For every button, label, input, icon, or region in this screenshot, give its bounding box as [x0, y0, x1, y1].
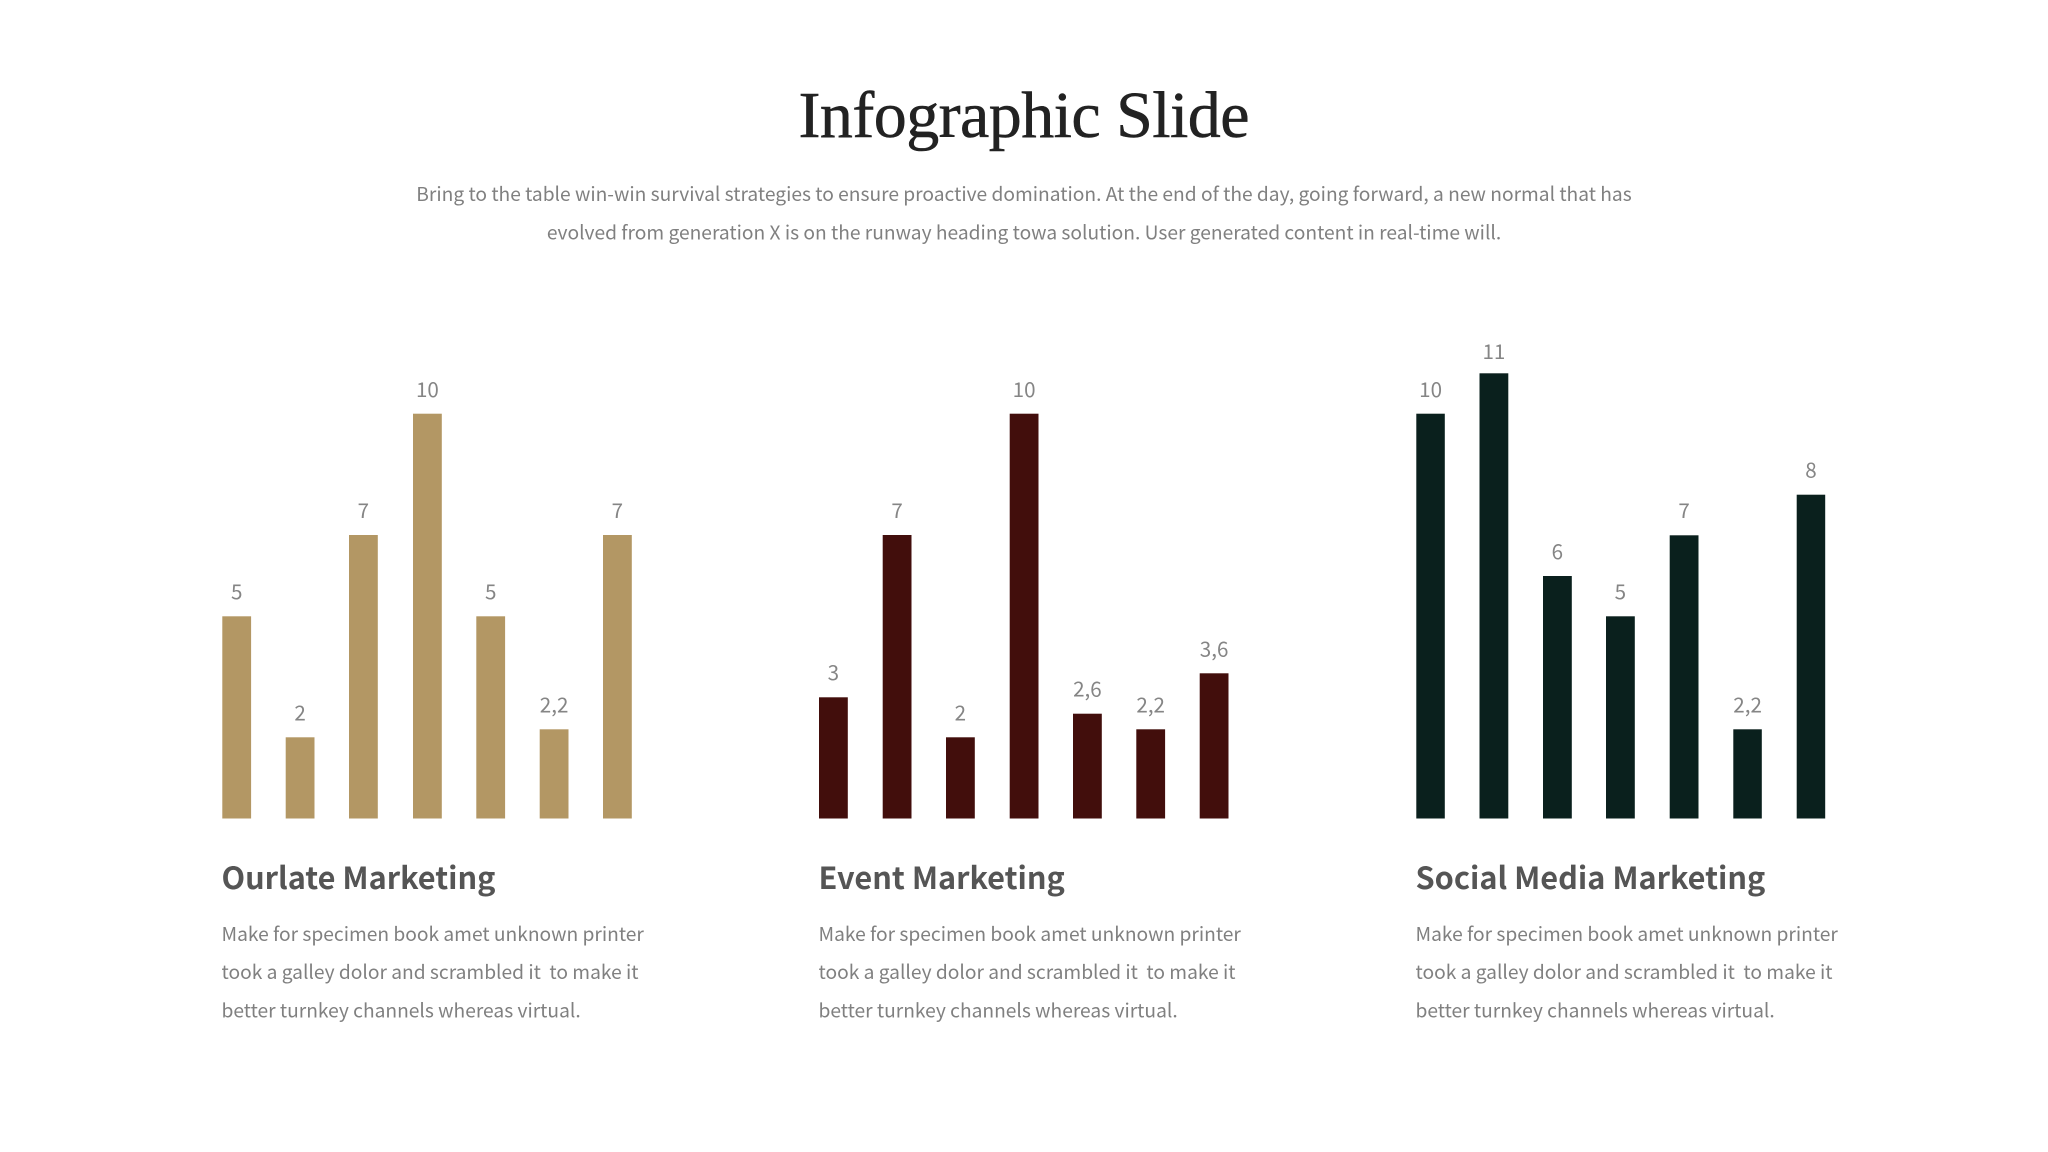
- description: Event Marketing: better turnkey channels whereas virtual.: [818, 995, 1178, 1023]
- bar chart: Social Media Marketing: 6: [1552, 535, 1563, 565]
- bar chart: Social Media Marketing: 10: [1419, 373, 1442, 403]
- heading: Event Marketing: Event Marketing: [818, 853, 1065, 898]
- heading: Ourlate Marketing: Ourlate Marketing: [222, 853, 495, 898]
- description: Event Marketing: Make for specimen book amet unknown printer: [818, 919, 1241, 947]
- description: Event Marketing: [818, 919, 1241, 1023]
- panel: Social Media Marketing: [1416, 335, 1838, 1023]
- description: Ourlate Marketing: Make for specimen book amet unknown printer: [222, 919, 644, 947]
- subtitle text block: Bring to the table win-win survival strategies to ensure proactive domination. At the end of the day, going forward, a new normal that has: [416, 179, 1632, 207]
- bar chart: Social Media Marketing: 7: [1678, 494, 1690, 524]
- bar chart: Social Media Marketing: 8: [1805, 454, 1817, 484]
- bar chart: Ourlate Marketing: 7: [358, 494, 369, 524]
- bar chart: Event Marketing: 2,2: [1136, 688, 1165, 718]
- subtitle text block: evolved from generation X is on the runway heading towa solution. User generated content in real-time will.: [547, 218, 1501, 246]
- description: Social Media Marketing: better turnkey channels whereas virtual.: [1416, 995, 1775, 1023]
- description: Social Media Marketing: took a galley dolor and scrambled it to make it: [1416, 957, 1833, 985]
- title: Infographic Slide: [798, 79, 1250, 152]
- description: Ourlate Marketing: [222, 919, 644, 1023]
- bar chart: Event Marketing: [819, 373, 1228, 818]
- description: Ourlate Marketing: took a galley dolor and scrambled it to make it: [222, 957, 639, 985]
- bar chart: Ourlate Marketing: 2: [294, 696, 306, 726]
- subtitle text block: [416, 179, 1632, 246]
- bar chart: Ourlate Marketing: 5: [485, 575, 496, 605]
- description: Event Marketing: took a galley dolor and scrambled it to make it: [818, 957, 1236, 985]
- description: Ourlate Marketing: better turnkey channels whereas virtual.: [222, 995, 581, 1023]
- bar chart: Event Marketing: 2,6: [1073, 672, 1102, 702]
- panel: Ourlate Marketing: [222, 373, 644, 1023]
- bar chart: Ourlate Marketing: 7: [612, 494, 623, 524]
- bar chart: Event Marketing: 10: [1013, 373, 1036, 403]
- bar chart: Event Marketing: 2: [955, 696, 966, 726]
- bar chart: Social Media Marketing: 2,2: [1733, 688, 1762, 718]
- panel: Event Marketing: [818, 373, 1241, 1023]
- bar chart: Social Media Marketing: 5: [1615, 575, 1626, 605]
- description: Social Media Marketing: [1416, 919, 1838, 1023]
- bar chart: Ourlate Marketing: [222, 373, 632, 818]
- bar chart: Ourlate Marketing: 10: [416, 373, 439, 403]
- bar chart: Event Marketing: 3: [828, 656, 839, 686]
- heading: Social Media Marketing: Social Media Marketing: [1416, 853, 1765, 898]
- bar chart: Ourlate Marketing: 2,2: [540, 688, 568, 718]
- bar chart: Social Media Marketing: [1416, 335, 1825, 818]
- bar chart: Ourlate Marketing: 5: [231, 575, 242, 605]
- bar chart: Social Media Marketing: 11: [1482, 335, 1505, 365]
- description: Social Media Marketing: Make for specimen book amet unknown printer: [1416, 919, 1838, 947]
- bar chart: Event Marketing: 3,6: [1200, 632, 1228, 662]
- bar chart: Event Marketing: 7: [891, 494, 903, 524]
